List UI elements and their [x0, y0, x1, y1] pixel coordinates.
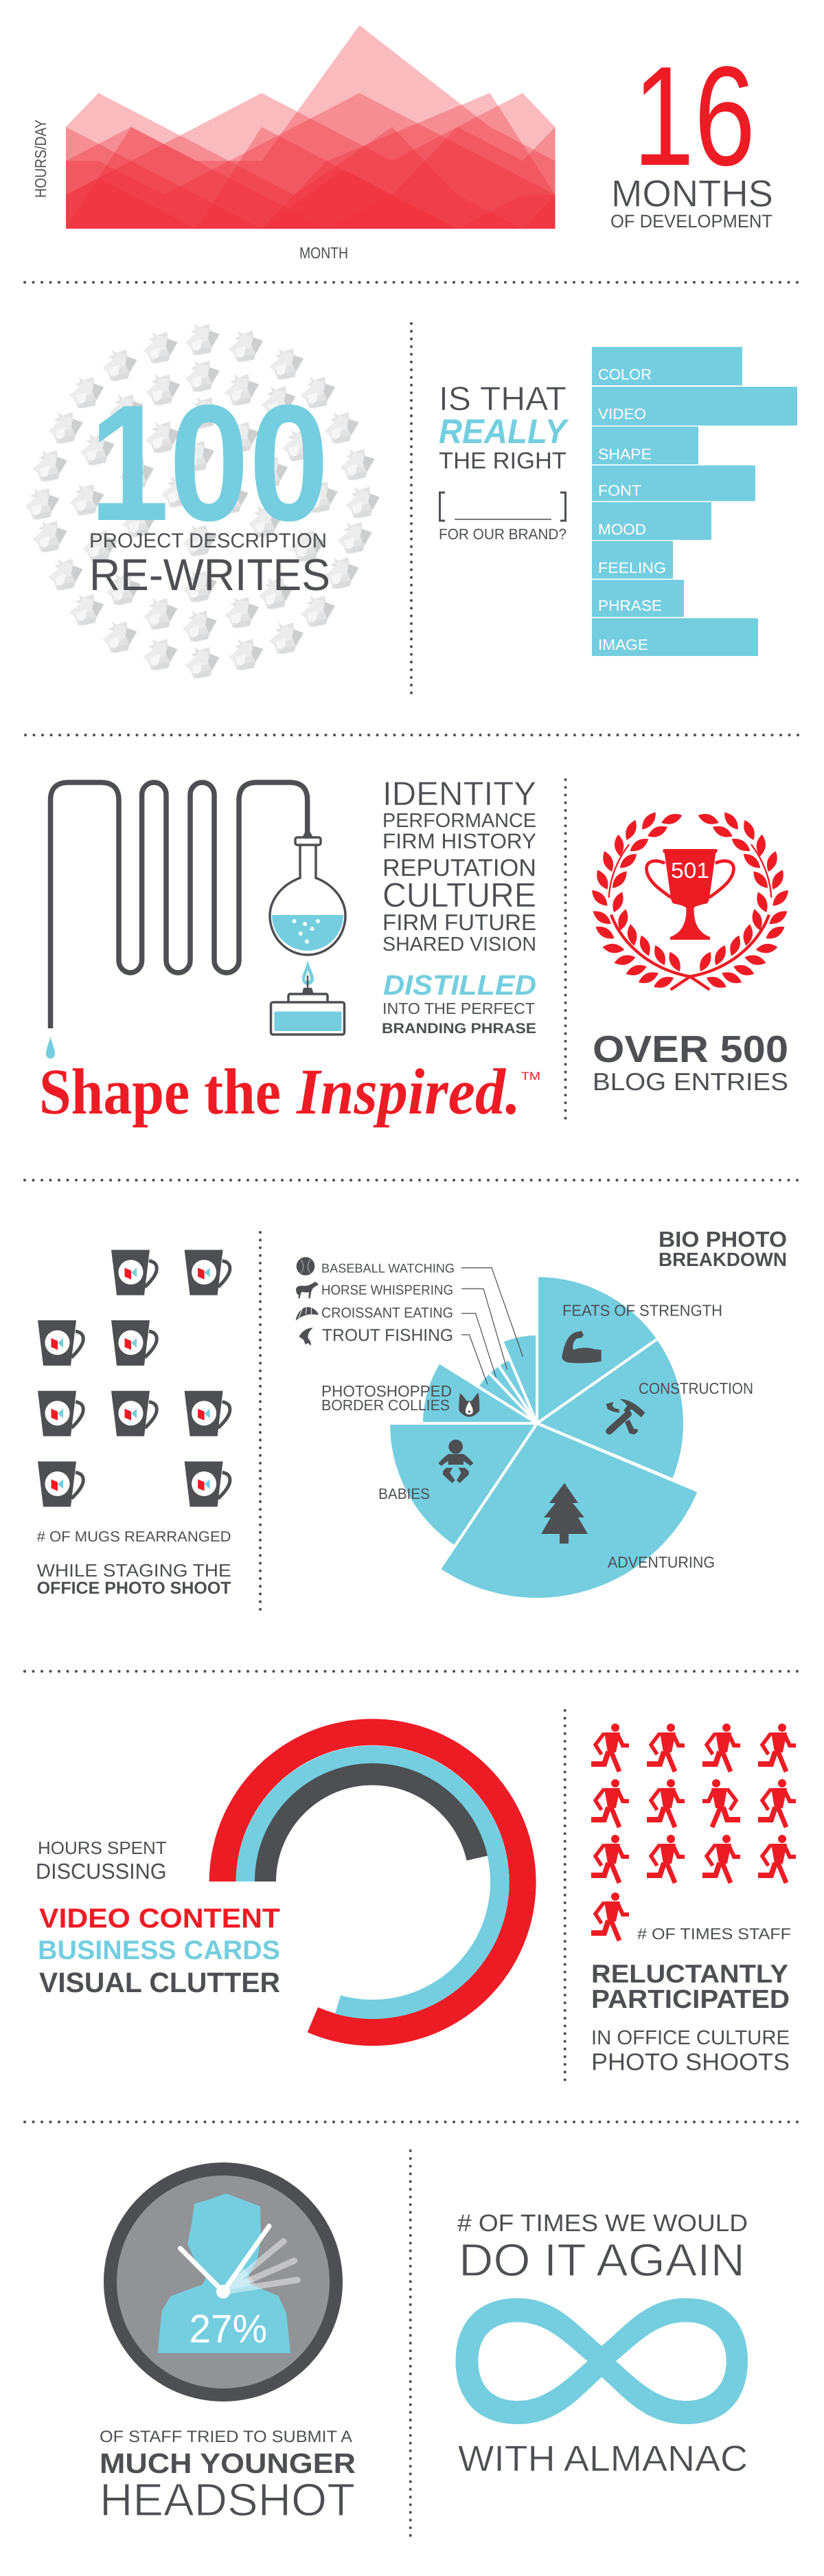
word stack: FIRM FUTURE	[382, 909, 536, 935]
small slice labels: HORSE WHISPERING	[321, 1283, 453, 1298]
mug icons	[38, 1250, 230, 1507]
word stack: IDENTITY	[382, 776, 536, 813]
pie labels: PHOTOSHOPPED	[321, 1382, 452, 1400]
ring legend	[36, 1838, 280, 1998]
icon: horse	[296, 1282, 319, 1298]
headshot caption: OF STAFF TRIED TO SUBMIT A	[100, 2428, 352, 2446]
y axis label: HOURS/DAY	[32, 120, 49, 198]
headshot caption: HEADSHOT	[100, 2474, 355, 2526]
word stack: DISTILLED	[383, 969, 536, 1001]
tagline: TM	[521, 1070, 540, 1083]
icon: baby	[438, 1440, 473, 1483]
bar chart: words debated: COLOR	[598, 366, 652, 383]
big number 100: 100	[89, 371, 329, 556]
panel: younger headshot	[100, 2162, 356, 2526]
big number 16: 16	[633, 37, 755, 195]
bar chart: words debated	[592, 347, 797, 656]
icon: trophy: 501	[671, 858, 709, 883]
word stack: INTO THE PERFECT	[382, 999, 535, 1017]
pie labels: BORDER COLLIES	[321, 1397, 450, 1414]
pie chart	[389, 1276, 699, 1599]
runners caption: IN OFFICE CULTURE	[591, 2026, 790, 2049]
icon: clock portrait	[104, 2162, 343, 2402]
question text: THE RIGHT	[439, 448, 566, 474]
do it again heading	[457, 2210, 748, 2286]
icon: baseball	[297, 1257, 314, 1276]
small slice labels: CROISSANT EATING	[321, 1305, 453, 1321]
panel: hours spent discussing	[36, 1719, 536, 2046]
x axis label: MONTH	[299, 244, 348, 262]
panel: blog entries	[588, 809, 792, 1096]
pie labels: BABIES	[378, 1485, 430, 1502]
icon: distillation tube	[51, 782, 308, 1028]
panel: development timeline	[32, 25, 773, 262]
word stack: BRANDING PHRASE	[382, 1021, 536, 1037]
icon: laurel wreath	[588, 809, 792, 991]
small slice labels: BASEBALL WATCHING	[321, 1261, 455, 1276]
mugs caption: OFFICE PHOTO SHOOT	[37, 1579, 231, 1598]
of development: OF DEVELOPMENT	[610, 211, 772, 231]
icon: pine tree	[541, 1483, 588, 1544]
bar chart: words debated: SHAPE	[598, 445, 652, 463]
pie labels: ADVENTURING	[608, 1553, 715, 1571]
bar chart: words debated: VIDEO	[598, 405, 646, 422]
bar chart: words debated: IMAGE	[598, 636, 648, 653]
bar chart: words debated: FONT	[598, 482, 641, 499]
bar chart: words debated: MOOD	[598, 521, 646, 538]
icon: croissant	[296, 1307, 319, 1321]
mugs caption: # OF MUGS REARRANGED	[37, 1528, 231, 1545]
months heading: MONTHS	[611, 172, 773, 214]
bar chart: words debated: PHRASE	[598, 597, 662, 614]
crumpled paper circle	[25, 324, 380, 679]
word stack: SHARED VISION	[382, 934, 536, 956]
panel: do it again	[456, 2210, 748, 2479]
runner icons	[591, 1724, 796, 1941]
runners caption	[591, 1925, 791, 2076]
area chart: hours per day by month	[66, 25, 555, 229]
panel: bio photo breakdown	[296, 1227, 787, 1599]
project description: PROJECT DESCRIPTION	[89, 530, 327, 552]
icon: trout	[299, 1328, 313, 1346]
tagline: Inspired.	[296, 1055, 520, 1128]
question text: FOR OUR BRAND?	[439, 526, 566, 543]
heading	[659, 1227, 787, 1270]
over 500: OVER 500	[593, 1028, 788, 1070]
question text: IS THAT	[439, 381, 566, 418]
word stack: CULTURE	[382, 876, 536, 914]
ring legend: DISCUSSING	[36, 1859, 167, 1884]
ring legend: HOURS SPENT	[38, 1838, 167, 1858]
tagline: Shape the	[39, 1055, 281, 1128]
headshot caption	[100, 2428, 356, 2526]
mugs caption: WHILE STAGING THE	[37, 1560, 231, 1581]
runners caption: PARTICIPATED	[591, 1985, 790, 2014]
icon: flask	[270, 830, 345, 955]
word stack	[382, 776, 536, 1037]
icon: trophy	[647, 849, 733, 940]
bar chart: words debated: FEELING	[598, 559, 666, 576]
heading: BIO PHOTO	[659, 1227, 787, 1252]
ring legend: BUSINESS CARDS	[38, 1936, 280, 1965]
ring legend: VISUAL CLUTTER	[39, 1967, 280, 1998]
mugs caption	[37, 1528, 231, 1598]
small slice labels: TROUT FISHING	[322, 1326, 453, 1345]
with almanac: WITH ALMANAC	[458, 2439, 748, 2479]
question text	[439, 381, 569, 543]
ring chart	[209, 1719, 536, 2046]
icon: burner	[271, 960, 345, 1035]
heading: BREAKDOWN	[659, 1249, 787, 1270]
small slice labels	[321, 1261, 523, 1385]
pie labels: CONSTRUCTION	[639, 1379, 753, 1397]
icon: hammer and wrench	[606, 1399, 645, 1434]
question text: REALLY	[439, 412, 569, 451]
pie labels	[321, 1302, 753, 1571]
do it again heading: DO IT AGAIN	[459, 2235, 745, 2286]
re-writes: RE-WRITES	[89, 550, 330, 600]
panel: is that really the right word	[439, 347, 797, 656]
tagline	[39, 1055, 540, 1128]
panel: staff participation	[591, 1724, 796, 2076]
runners caption: RELUCTANTLY	[591, 1959, 788, 1988]
icon: infinity	[456, 2298, 748, 2424]
icon: border collie	[459, 1392, 479, 1417]
icon: water drop	[46, 1037, 55, 1059]
panel: project description re-writes	[25, 324, 380, 679]
runners caption: PHOTO SHOOTS	[591, 2048, 790, 2076]
do it again heading: # OF TIMES WE WOULD	[457, 2210, 748, 2237]
panel: mugs rearranged	[37, 1250, 231, 1598]
word stack: REPUTATION	[382, 855, 536, 881]
word stack: PERFORMANCE	[382, 810, 536, 832]
ring legend: VIDEO CONTENT	[39, 1903, 280, 1934]
word stack: FIRM HISTORY	[382, 829, 536, 853]
pie labels: FEATS OF STRENGTH	[562, 1302, 722, 1320]
runners caption: # OF TIMES STAFF	[637, 1925, 791, 1943]
blog entries: BLOG ENTRIES	[593, 1067, 788, 1096]
panel: distilling the branding phrase	[39, 776, 540, 1128]
icon: clock portrait: 27%	[190, 2307, 267, 2351]
headshot caption: MUCH YOUNGER	[100, 2448, 356, 2479]
icon: flexed arm	[562, 1331, 602, 1363]
